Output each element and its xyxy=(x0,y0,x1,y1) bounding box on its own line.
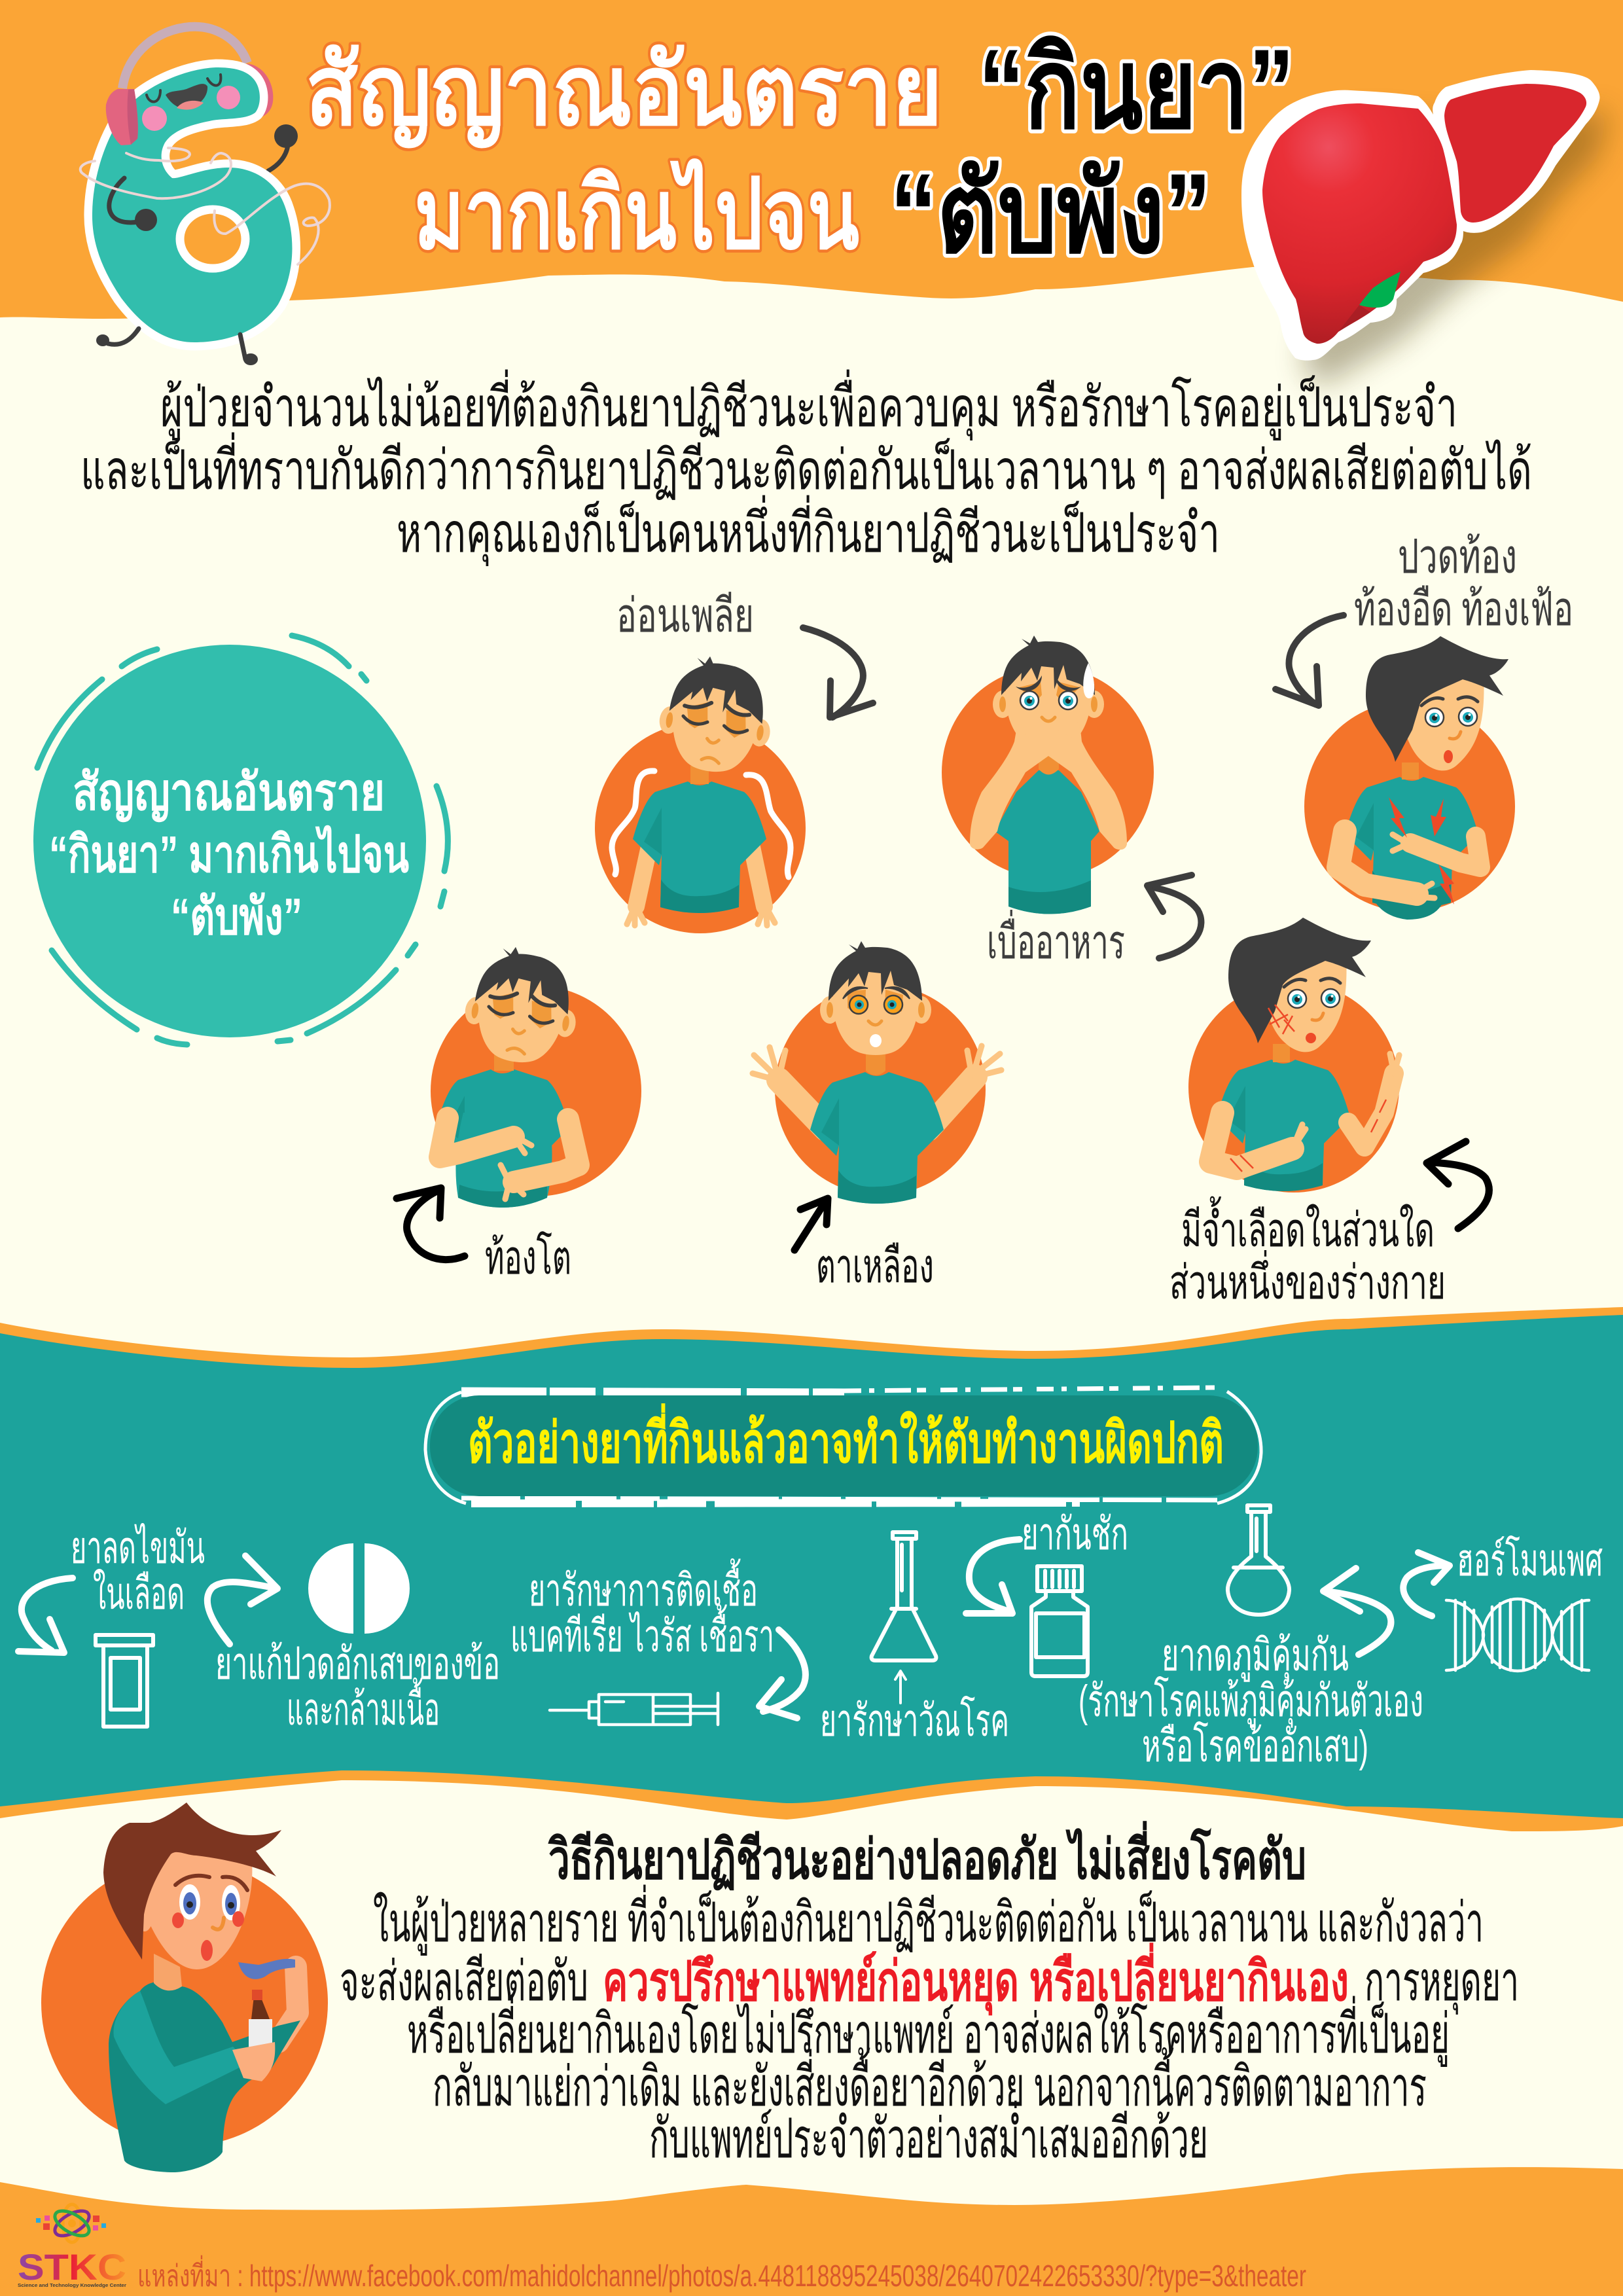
heading badge: ตัวอย่างยาที่กินแล้วอาจทำให้ตับทำงานผิดปกติ xyxy=(468,1403,1224,1475)
medicine: immunosuppressant xyxy=(1079,1505,1423,1771)
face xyxy=(166,84,207,109)
arms xyxy=(779,1077,975,1129)
headphone band xyxy=(122,27,247,88)
head xyxy=(459,941,585,1069)
advice line 2 xyxy=(340,1943,1519,2016)
medicine: anti-inflammatory xyxy=(207,1543,500,1734)
shirt xyxy=(1345,777,1478,908)
medicine: tuberculosis xyxy=(820,1532,1009,1746)
title xyxy=(306,26,1294,276)
advice heading: วิธีกินยาปฏิชีวนะอย่างปลอดภัย ไม่เสี่ยงโรคตับ xyxy=(548,1821,1306,1891)
title line 1: สัญญาณอันตราย xyxy=(306,35,942,149)
neck xyxy=(494,1052,514,1071)
symptom label: loss of appetite: เบื่ออาหาร xyxy=(987,910,1125,969)
arrow: bruises xyxy=(1427,1141,1489,1229)
advice person xyxy=(41,1803,328,2172)
footer wave xyxy=(0,2167,1623,2296)
symptom: jaundice xyxy=(753,941,1001,1204)
medicine: anti-inflammatory: ยาแก้ปวดอักเสบของข้อ xyxy=(215,1639,500,1689)
symptom label: jaundice: ตาเหลือง xyxy=(816,1240,934,1293)
face xyxy=(139,1842,252,1969)
arrow: weakness xyxy=(803,628,873,717)
medicine: immunosuppressant: (รักษาโรคแพ้ภูมิคุ้มกันตัวเอง xyxy=(1079,1676,1423,1728)
arrow: enlarged abdomen xyxy=(397,1188,465,1260)
shirt xyxy=(1217,1060,1350,1191)
symptom label: enlarged abdomen: ท้องโต xyxy=(485,1230,571,1284)
head xyxy=(653,651,779,779)
circle text line 1: สัญญาณอันตราย xyxy=(73,763,385,822)
arms xyxy=(1338,831,1417,894)
logo: STKC wordmark: Science and Technology Knowledge Center xyxy=(18,2284,126,2288)
header wave xyxy=(0,0,1623,319)
medicine: lipid lowering: ในเลือด xyxy=(93,1568,185,1619)
symptom label: stomach ache xyxy=(1354,531,1573,636)
circle text line 2: “กินยา” มากเกินไปจน xyxy=(49,825,409,883)
medicine: lipid lowering: ยาลดไขมัน xyxy=(71,1522,205,1573)
icon: liver xyxy=(1241,70,1610,386)
intro line 3: หากคุณเองก็เป็นคนหนึ่งที่กินยาปฏิชีวนะเป็นประจำ xyxy=(397,495,1220,567)
six body xyxy=(92,67,292,342)
title emphasis 2: “ตับพัง” xyxy=(890,151,1211,276)
symptom: stomach ache xyxy=(1304,636,1515,920)
head xyxy=(1393,674,1484,770)
arms xyxy=(440,1118,514,1157)
right arm xyxy=(268,139,288,171)
headphone right cup xyxy=(247,63,273,118)
medicine: sex hormone xyxy=(1403,1535,1603,1671)
symptom label: weakness: อ่อนเพลีย xyxy=(616,590,754,642)
arrow: jaundice xyxy=(794,1198,828,1250)
spoon xyxy=(238,1959,295,1979)
medicine: immunosuppressant: ยากดภูมิคุ้มกัน xyxy=(1162,1630,1349,1682)
medicine: anticonvulsant: ยากันชัก xyxy=(1022,1509,1128,1559)
shirt xyxy=(436,1069,569,1202)
circle text line 3: “ตับพัง” xyxy=(171,888,302,945)
symptom: bruises xyxy=(1188,918,1399,1193)
neck xyxy=(154,1954,182,1990)
sweat lines xyxy=(612,771,791,877)
left ear cup xyxy=(106,89,138,145)
symptom: enlarged abdomen xyxy=(431,941,641,1208)
advice line 2: การหยุดยา xyxy=(1364,1950,1519,2015)
advice line 2: จะส่งผลเสียต่อตับ xyxy=(340,1950,588,2012)
lightning xyxy=(1389,797,1454,905)
medicine: anti-infective: ยารักษาการติดเชื้อ xyxy=(529,1558,758,1615)
advice line 5: กับแพทย์ประจำตัวอย่างสม่ำเสมออีกด้วย xyxy=(649,2100,1208,2169)
character: number six with headphones xyxy=(80,27,330,365)
eyes and brows xyxy=(1016,675,1081,721)
right arm raised xyxy=(278,1967,298,2042)
symptom label: bruises: มีจ้ำเลือดในส่วนใด xyxy=(1181,1196,1435,1257)
earphone wire xyxy=(80,148,330,264)
logo: STKC atom xyxy=(36,2204,106,2242)
head xyxy=(820,941,931,1055)
symptom label: bruises xyxy=(1169,1196,1446,1309)
body xyxy=(109,1982,300,2172)
brush border xyxy=(425,1388,1261,1503)
medicine: tuberculosis: ยารักษาวัณโรค xyxy=(820,1695,1009,1746)
logo: STKC wordmark: STKC xyxy=(18,2246,126,2287)
medicine: lipid lowering xyxy=(18,1522,205,1727)
heading badge xyxy=(425,1388,1261,1503)
sweat drop xyxy=(1083,663,1094,698)
panel: medicines band xyxy=(0,1307,1623,1831)
six hole xyxy=(180,209,245,268)
head xyxy=(993,636,1104,749)
limbs xyxy=(109,178,146,223)
intro text block xyxy=(80,369,1532,567)
arrow: loss of appetite xyxy=(1147,875,1201,958)
title line 2: มากเกินไปจน xyxy=(414,158,859,269)
shirt xyxy=(995,770,1099,914)
symptom label: stomach ache: ปวดท้อง xyxy=(1398,531,1517,583)
medicine: immunosuppressant: หรือโรคข้ออักเสบ) xyxy=(1142,1721,1368,1771)
medicine: anticonvulsant xyxy=(966,1509,1128,1676)
medicine: anti-infective: แบคทีเรีย ไวรัส เชื้อรา xyxy=(510,1604,774,1661)
shirt xyxy=(810,1072,944,1204)
jaundiced eyes xyxy=(843,987,910,1025)
shirt xyxy=(633,781,766,913)
head xyxy=(1228,918,1371,1052)
arms xyxy=(636,838,764,906)
neck xyxy=(1039,753,1059,775)
medicine: anti-inflammatory: และกล้ามเนื้อ xyxy=(287,1677,440,1734)
hair xyxy=(103,1803,281,1960)
symptom label: bruises: ส่วนหนึ่งของร่างกาย xyxy=(1169,1250,1446,1309)
eyes xyxy=(175,1876,247,1920)
advice text block xyxy=(340,1821,1519,2169)
hand xyxy=(232,2042,275,2081)
medicine: anti-infective xyxy=(510,1558,806,1725)
arm xyxy=(113,1991,249,2104)
arms and hands over mouth xyxy=(970,722,1127,850)
arrow: stomach ache xyxy=(1275,615,1344,706)
title emphasis 1: “กินยา” xyxy=(978,26,1294,152)
arms xyxy=(1211,1113,1293,1168)
neck xyxy=(1273,1044,1290,1062)
bottle xyxy=(249,1990,272,2052)
neck xyxy=(866,1052,885,1075)
symptom: loss of appetite xyxy=(942,636,1154,914)
neck xyxy=(1402,762,1419,780)
panel: danger signs circle xyxy=(33,636,448,1045)
symptom: weakness xyxy=(595,651,806,933)
